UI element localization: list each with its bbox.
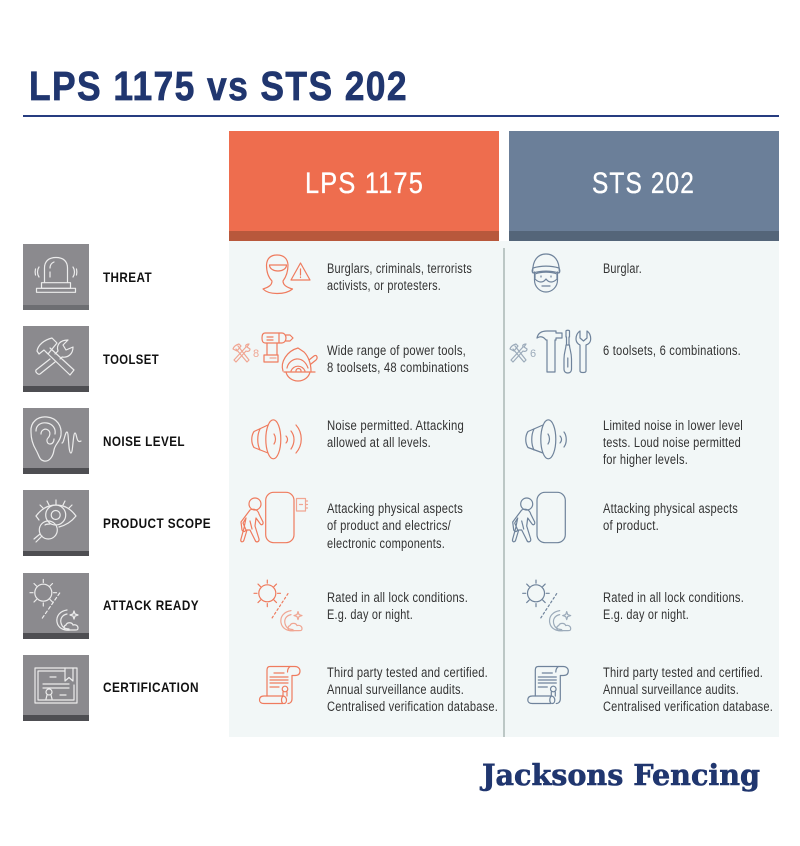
- LPS certification: Third party tested and certified.: [327, 665, 488, 680]
- STS attack ready: E.g. day or night.: [603, 607, 689, 622]
- row label: noise level: [23, 408, 185, 474]
- LPS noise level: allowed at all levels.: [327, 435, 431, 450]
- row label: threat: THREAT: [103, 269, 152, 285]
- STS product scope: of product.: [603, 518, 659, 533]
- row label: attack ready: [23, 573, 199, 639]
- row label: attack ready: ATTACK READY: [103, 597, 199, 613]
- LPS certification: [260, 665, 498, 714]
- LPS certification: Centralised verification database.: [327, 699, 498, 714]
- STS toolset: [510, 330, 741, 373]
- LPS toolset: 8 toolsets, 48 combinations: [327, 360, 469, 375]
- icon: burglar with cap and goggles: [532, 254, 560, 292]
- STS attack ready: [523, 580, 744, 631]
- icon: sun and moon: [254, 580, 302, 631]
- LPS product scope: [241, 492, 463, 551]
- LPS toolset: Wide range of power tools,: [327, 343, 466, 358]
- STS product scope: [512, 492, 738, 543]
- STS noise level: tests. Loud noise permitted: [603, 435, 741, 450]
- header: STS 202: [509, 131, 779, 241]
- row label: certification: CERTIFICATION: [103, 679, 199, 695]
- icon: 6 toolsets, hammer, screwdriver, spanner: [510, 330, 591, 373]
- row label: toolset: [23, 326, 159, 392]
- STS certification: Third party tested and certified.: [603, 665, 763, 680]
- STS certification: [528, 665, 773, 714]
- icon: sun and moon: [523, 580, 571, 631]
- row label: noise level: NOISE LEVEL: [103, 433, 185, 449]
- icon: person and product: [512, 492, 565, 543]
- logo: Jacksons Fencing: Jacksons Fencing: [479, 758, 760, 792]
- LPS threat: Burglars, criminals, terrorists: [327, 261, 472, 276]
- STS noise level: [526, 418, 743, 467]
- row label: threat: [23, 244, 152, 310]
- header: LPS 1175: [229, 131, 499, 241]
- LPS noise level: [252, 418, 464, 459]
- STS noise level: for higher levels.: [603, 452, 688, 467]
- LPS product scope: Attacking physical aspects: [327, 501, 463, 516]
- row label: product scope: PRODUCT SCOPE: [103, 515, 211, 531]
- STS noise level: Limited noise in lower level: [603, 418, 743, 433]
- LPS attack ready: Rated in all lock conditions.: [327, 590, 468, 605]
- icon: balaclava and warning: [263, 255, 310, 294]
- row label: certification: [23, 655, 199, 721]
- row label: product scope: [23, 490, 211, 556]
- icon: loud speaker: [252, 420, 301, 459]
- STS toolset: 6 toolsets, 6 combinations.: [603, 343, 741, 358]
- STS threat: Burglar.: [603, 261, 642, 276]
- icon: 8 toolsets, drill and saw: [233, 333, 317, 381]
- title: LPS 1175 vs STS 202: [29, 63, 408, 109]
- icon: 8 toolsets, drill and saw: 8: [253, 348, 259, 360]
- LPS threat: [263, 255, 472, 294]
- LPS product scope: electronic components.: [327, 536, 445, 551]
- STS attack ready: Rated in all lock conditions.: [603, 590, 744, 605]
- icon: person attacking product with electrics: [241, 492, 308, 543]
- icon: certificate scroll: [260, 666, 300, 704]
- LPS attack ready: [254, 580, 468, 631]
- STS product scope: Attacking physical aspects: [603, 501, 738, 516]
- STS certification: Annual surveillance audits.: [603, 682, 739, 697]
- LPS product scope: of product and electrics/: [327, 518, 451, 533]
- header: LPS 1175: LPS 1175: [305, 167, 424, 200]
- LPS noise level: Noise permitted. Attacking: [327, 418, 464, 433]
- row label: toolset: TOOLSET: [103, 351, 159, 367]
- header: STS 202: STS 202: [592, 167, 695, 200]
- LPS threat: activists, or protesters.: [327, 278, 441, 293]
- STS threat: [532, 254, 642, 292]
- LPS certification: Annual surveillance audits.: [327, 682, 464, 697]
- icon: 6 toolsets, hammer, screwdriver, spanner: 6: [530, 348, 536, 360]
- LPS toolset: [233, 333, 469, 381]
- panel: comparison background: [229, 241, 779, 737]
- icon: certificate scroll: [528, 666, 568, 704]
- LPS attack ready: E.g. day or night.: [327, 607, 413, 622]
- icon: limited noise speaker: [526, 420, 566, 459]
